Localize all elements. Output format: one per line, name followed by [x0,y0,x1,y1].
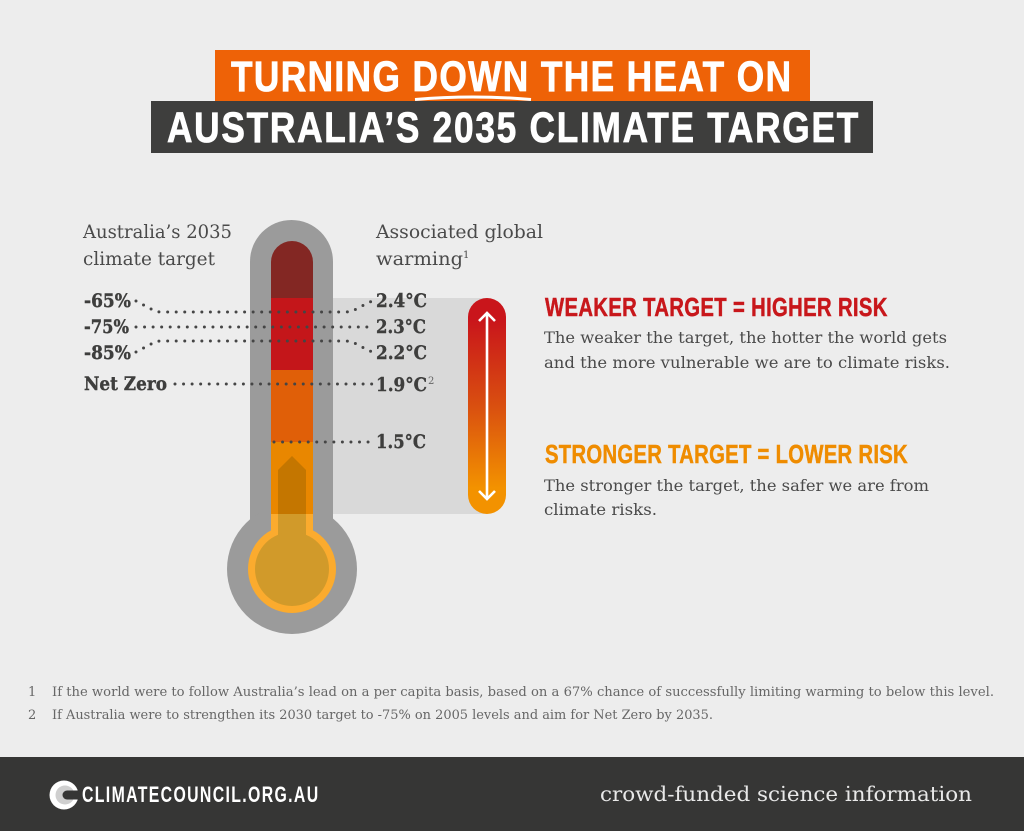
footnotes: 1 [28,685,36,700]
grey risk band panel [333,298,487,514]
target labels: -85% [84,342,131,364]
target labels: Net Zero [84,373,167,395]
footnotes: 2 [28,708,36,723]
warming labels: 2.4°C [376,290,427,312]
stronger target heading: STRONGER TARGET = LOWER RISK [545,440,908,469]
right column heading: 1 [463,250,469,261]
left column heading: climate target [83,248,215,270]
title line 2: AUSTRALIA’S 2035 CLIMATE TARGET [167,104,858,152]
footnotes: If Australia were to strengthen its 2030 target to -75% on 2005 levels and aim for Net Zero by 2035. [52,708,713,723]
icon: Climate Council logo [50,780,80,810]
stronger target description: climate risks. [544,500,657,519]
weaker target description: The weaker the target, the hotter the world gets [544,328,947,347]
left column heading: Australia’s 2035 [82,221,232,243]
footnotes: If the world were to follow Australia’s lead on a per capita basis, based on a 67% chance of successfully limiting warming to below this level. [52,685,994,700]
warming labels: 2.2°C [376,342,427,364]
warming labels: 1.9°C [376,374,427,396]
warming labels: 2 [428,376,434,387]
dotted connector lines [136,301,372,442]
weaker target description: and the more vulnerable we are to climate risks. [544,353,950,372]
gradient risk bar with double arrow [468,298,506,514]
target labels [84,290,167,395]
footer bar [0,757,1024,831]
tagline: crowd-funded science information [600,782,972,806]
weaker target text block [544,293,952,372]
website address: CLIMATECOUNCIL.ORG.AU [82,784,318,808]
target labels: -65% [84,290,131,312]
right column heading: warming [376,248,463,270]
target labels: -75% [84,316,129,338]
right column heading: Associated global [375,221,543,243]
title line 1: TURNING DOWN THE HEAT ON [231,53,791,101]
weaker target heading: WEAKER TARGET = HIGHER RISK [545,293,888,322]
title [151,50,873,153]
stronger target text block [544,440,934,519]
thermometer [227,220,357,634]
stronger target description: The stronger the target, the safer we are from [544,476,929,495]
footnotes [28,685,994,723]
warming labels [376,290,434,453]
warming labels: 1.5°C [376,431,426,453]
warming labels: 2.3°C [376,316,426,338]
